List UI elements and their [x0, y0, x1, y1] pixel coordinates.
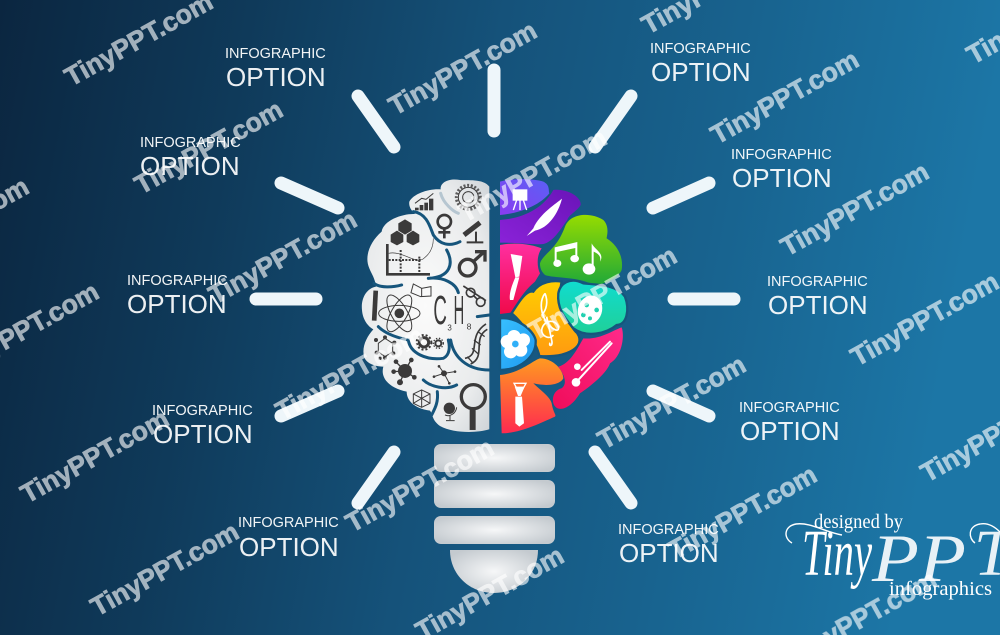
icon: large molecule — [391, 358, 417, 385]
option labels — [127, 41, 868, 568]
label 9 — [739, 400, 840, 446]
formula C3H8: H — [454, 288, 464, 333]
label 1 — [225, 46, 326, 92]
icon: molecule ring — [374, 335, 396, 360]
lobe: yellow — [512, 281, 580, 356]
label 10: INFOGRAPHIC — [618, 522, 719, 538]
designer logo: infographics — [889, 578, 992, 600]
lobe: green — [540, 215, 622, 285]
icon: gear — [456, 185, 480, 209]
formula C3H8: 3 — [447, 324, 452, 333]
watermarks: TinyPPT.com — [523, 240, 682, 346]
lobe: purple — [500, 190, 581, 244]
rays around the bulb — [256, 70, 734, 503]
watermarks: TinyPPT.com — [129, 94, 288, 200]
label 3: INFOGRAPHIC — [127, 273, 228, 289]
icon: gears — [417, 335, 443, 350]
icon: paint brushes — [573, 342, 612, 386]
label 10 — [618, 522, 719, 568]
formula C3H8: 8 — [467, 321, 472, 331]
watermarks: TinyPPT.com — [340, 432, 499, 538]
watermarks: TinyPPT.com — [663, 459, 822, 565]
formula C3H8: C — [433, 287, 447, 333]
label 4: INFOGRAPHIC — [152, 403, 253, 419]
icon: necktie — [514, 383, 526, 427]
icon: music notes — [553, 242, 601, 275]
left brain: science icons — [362, 179, 489, 432]
icon: DNA helix — [465, 324, 487, 364]
label 5 — [238, 515, 339, 562]
icon: bar chart — [415, 193, 433, 210]
watermarks: TinyPPT.com — [85, 516, 244, 622]
lobe: pink — [500, 244, 542, 314]
icon: atom — [379, 291, 420, 335]
watermarks: TinyPPT.com — [15, 403, 174, 509]
designer logo: designed by — [814, 512, 903, 533]
label 8: OPTION — [768, 290, 868, 320]
lobe: teal — [558, 281, 627, 334]
designer logo — [786, 512, 1000, 600]
label 8 — [767, 274, 868, 320]
icon: hexagons — [391, 219, 419, 245]
icon: female symbol — [438, 215, 451, 238]
icon: treble clef — [541, 293, 559, 345]
label 3: OPTION — [127, 289, 227, 319]
lobe: orange red — [500, 358, 563, 433]
label 4 — [152, 403, 253, 449]
icon: palette — [574, 292, 606, 328]
label 6: INFOGRAPHIC — [650, 41, 751, 57]
label 3 — [127, 273, 228, 319]
watermarks: TinyPPT.com — [705, 44, 864, 150]
icon: ruler — [372, 291, 378, 321]
icon: magnifier — [461, 385, 485, 430]
icon: feather — [527, 199, 562, 236]
label 4: OPTION — [153, 419, 253, 449]
icon: paint brush — [510, 254, 522, 300]
label 10: OPTION — [619, 538, 719, 568]
watermarks: TinyPPT.com — [592, 349, 751, 455]
bulb ring 2 — [434, 480, 555, 508]
label 9: OPTION — [740, 416, 840, 446]
label 5: INFOGRAPHIC — [238, 515, 339, 531]
brain grooves — [374, 193, 489, 415]
label 2: OPTION — [140, 151, 240, 181]
icon: cube — [413, 390, 430, 407]
designer logo: Tiny — [802, 517, 872, 590]
icon: globe — [444, 403, 457, 421]
label 5: OPTION — [239, 532, 339, 562]
bulb tip — [450, 550, 538, 593]
bulb ring 3 — [434, 516, 555, 544]
formula C3H8 — [433, 287, 472, 333]
lobe: crimson — [553, 327, 623, 409]
lobe: blue — [500, 318, 536, 370]
bulb ring 1 — [434, 444, 555, 472]
label 2: INFOGRAPHIC — [140, 135, 241, 151]
label 7 — [731, 147, 832, 193]
watermarks: TinyPPT.com — [270, 320, 429, 426]
icon: glasses — [463, 286, 486, 306]
label 1: INFOGRAPHIC — [225, 46, 326, 62]
label 7: INFOGRAPHIC — [731, 147, 832, 163]
brain silhouette — [362, 179, 489, 432]
icon: axis chart — [387, 238, 433, 274]
label 1: OPTION — [226, 62, 326, 92]
icon: male symbol — [459, 252, 485, 276]
watermarks: TinyPPT.com — [775, 156, 934, 262]
label 2 — [140, 135, 241, 181]
designer logo: PP — [871, 520, 966, 596]
bulb base — [434, 444, 555, 593]
label 9: INFOGRAPHIC — [739, 400, 840, 416]
label 8: INFOGRAPHIC — [767, 274, 868, 290]
lobe: periwinkle — [500, 179, 549, 215]
label 6 — [650, 41, 751, 87]
icon: microscope — [464, 223, 483, 242]
icon: easel — [513, 189, 527, 210]
right brain: colourful art lobes — [500, 179, 627, 433]
watermarks: TinyPPT.com — [845, 266, 1000, 372]
label 7: OPTION — [732, 163, 832, 193]
icon: book — [411, 284, 431, 297]
icon: small molecule — [433, 365, 456, 385]
label 6: OPTION — [651, 57, 751, 87]
watermarks: TinyPPT.com — [383, 15, 542, 121]
watermarks: TinyPPT.com — [203, 204, 362, 310]
icon: flower — [501, 330, 530, 358]
watermarks: TinyPPT.com — [453, 122, 612, 228]
